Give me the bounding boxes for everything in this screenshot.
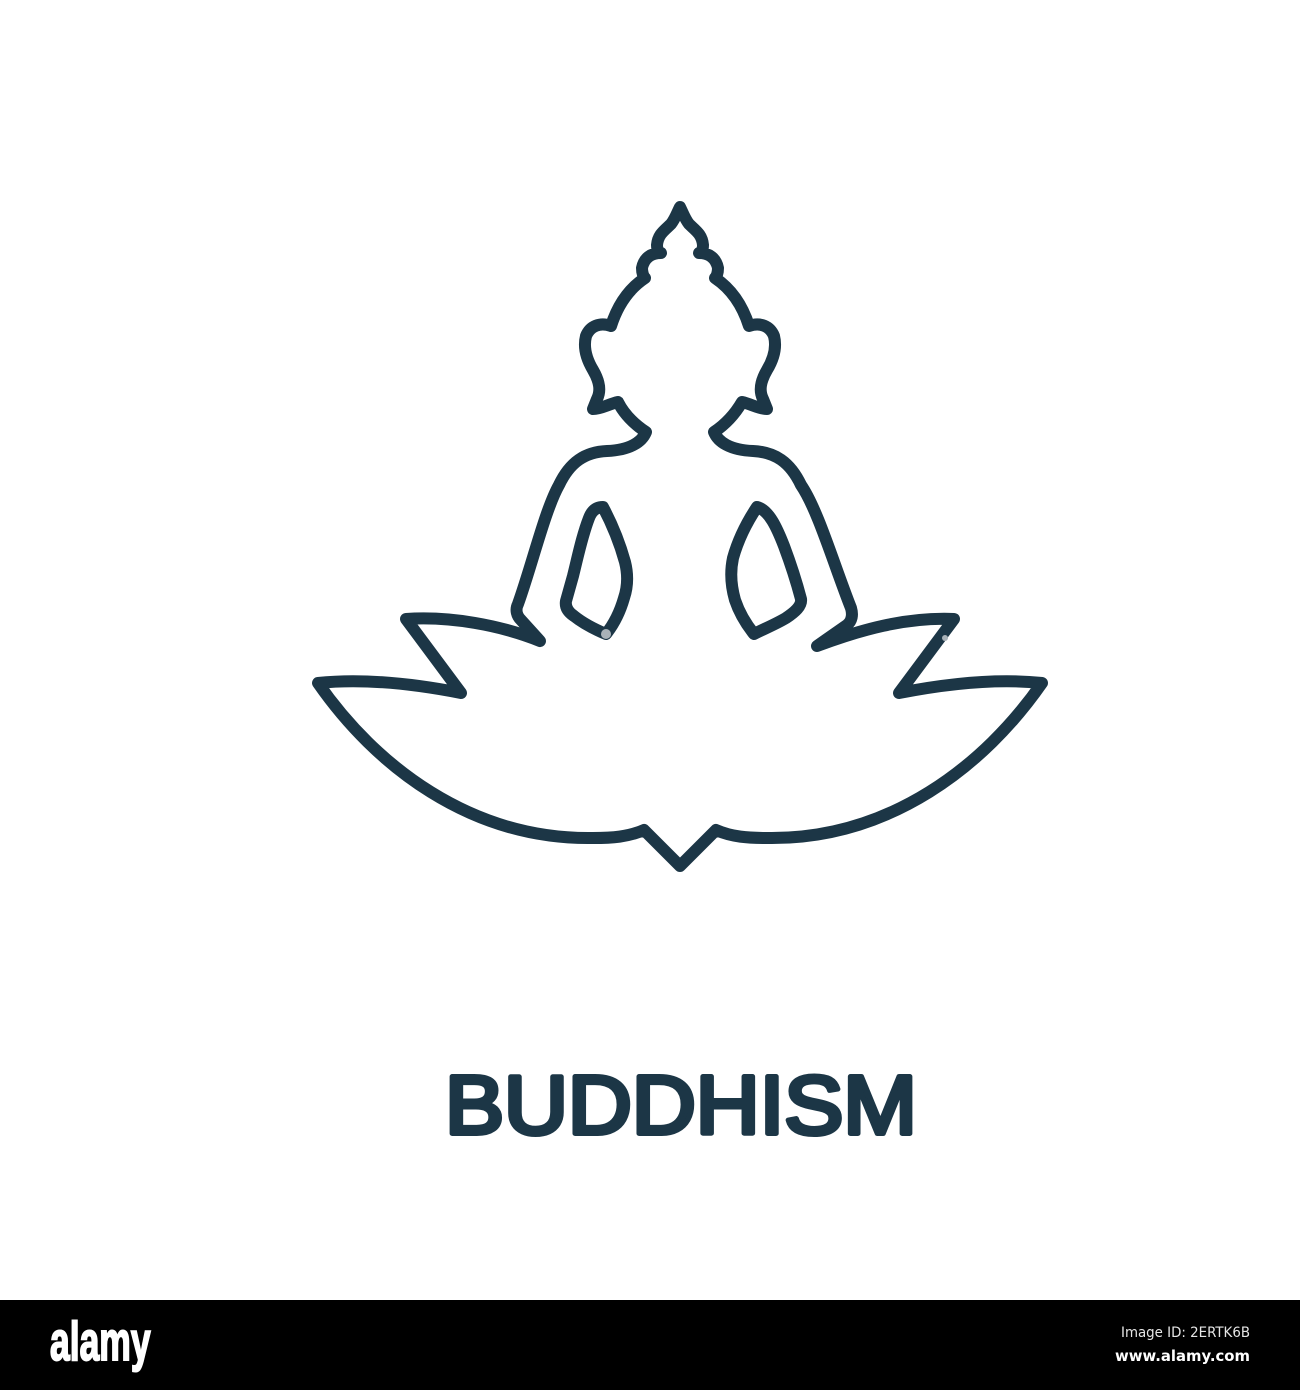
image id: Image ID: 2ERTK6B: [1121, 1325, 1250, 1341]
right arm gap: [731, 507, 801, 634]
buddha and lotus outline: [318, 207, 1042, 866]
website: www.alamy.com: [1115, 1347, 1250, 1365]
icon: meditating Buddha on lotus: [318, 207, 1042, 866]
title: BUDDHISM: [445, 1058, 917, 1152]
footer logo: alamy: [50, 1310, 151, 1372]
footer bar: [0, 1300, 1300, 1390]
watermark specks: [601, 629, 948, 641]
left arm gap: [566, 507, 627, 634]
